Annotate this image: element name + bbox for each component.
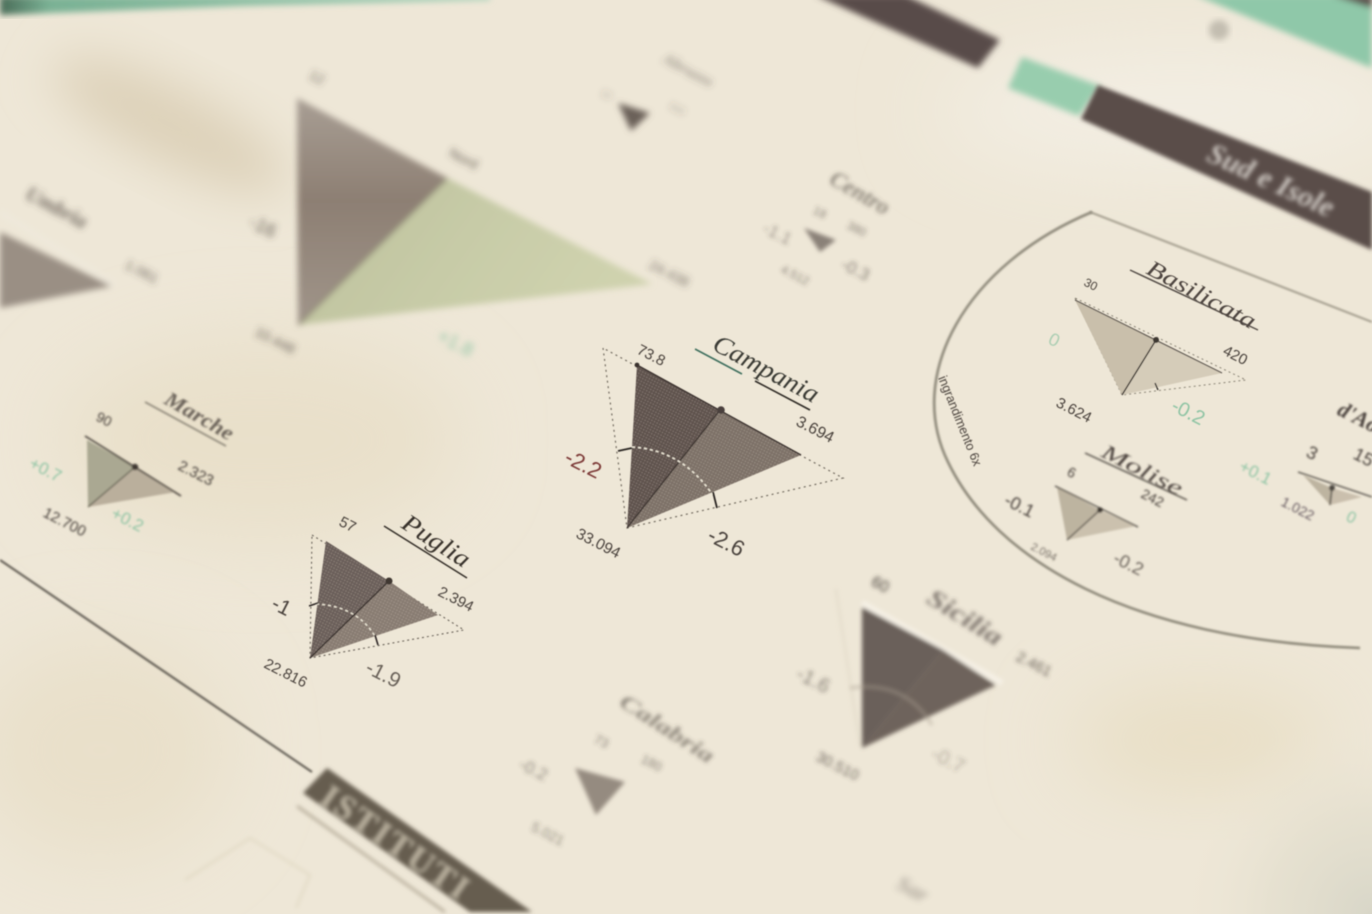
region: big Nord triangle: 10.448	[253, 323, 298, 357]
region: Campania: 73.8	[634, 341, 668, 370]
region: d'Aosta: +0.1	[1236, 457, 1275, 489]
region: Molise: 242	[1139, 485, 1167, 510]
region: Calabria: 180	[639, 751, 665, 775]
region: Calabria: -0.2	[516, 755, 551, 785]
region: big Nord triangle: +1.8	[434, 326, 477, 361]
region: Puglia: 57	[336, 513, 359, 536]
region: d'Aosta: 0	[1343, 508, 1359, 528]
region: big Nord triangle: 12	[307, 66, 328, 88]
region: Centro small	[760, 166, 894, 288]
region: Puglia: 2.394	[435, 583, 476, 616]
region: Campania: Campania	[708, 329, 824, 409]
region: Campania: -2.2	[561, 444, 606, 484]
region: big Nord triangle: Nord	[447, 144, 481, 172]
region: Molise: Molise	[1096, 438, 1187, 500]
region: d'Aosta: 3	[1303, 442, 1321, 464]
green tab	[1008, 57, 1100, 116]
region: Centro small: 4.512	[779, 262, 812, 288]
top green band	[0, 0, 490, 15]
region: Sicilia: -0.7	[928, 743, 968, 778]
region: Marche: 2.323	[175, 457, 216, 490]
region: Basilicata: 0	[1045, 329, 1063, 351]
heading bar: Sud e Isole	[1081, 85, 1372, 250]
region: Centro small: Centro	[826, 166, 894, 220]
region: Sicilia: 30.510	[813, 748, 862, 784]
region: top small triangle: Abruzzo	[659, 50, 716, 91]
region: Centro small: -0.3	[838, 255, 873, 285]
region: Sicilia	[793, 573, 1054, 784]
region: Puglia: -1	[268, 592, 295, 621]
region: Molise	[1001, 438, 1187, 580]
region: Sicilia: 60	[868, 573, 892, 597]
region: Sicilia: -1.6	[793, 663, 833, 698]
region: big Nord triangle: -16	[246, 212, 280, 243]
region: Molise: 2.094	[1029, 541, 1059, 564]
caption: ingrandimento 6x: ingrandimento 6x	[935, 374, 984, 469]
region: d'Aosta: 1.022	[1279, 493, 1317, 524]
region: Marche: 12.700	[40, 504, 89, 540]
region: left cut triangle: Umbria	[22, 181, 92, 234]
region: Puglia: 22.816	[261, 655, 310, 691]
region: Centro small: -1.1	[760, 219, 795, 249]
top right green band	[1195, 0, 1372, 68]
lower left box outline	[185, 838, 310, 908]
region: Campania: 33.094	[573, 525, 623, 562]
region: Puglia	[261, 509, 476, 693]
heading bar: Sud e Isole: Sud e Isole	[1202, 136, 1340, 224]
region: big Nord triangle	[246, 66, 692, 361]
region: Marche	[26, 386, 238, 540]
region: Basilicata: 3.624	[1053, 394, 1094, 427]
region: top small triangle: 310	[667, 101, 687, 118]
region: Puglia: -1.9	[362, 656, 404, 693]
region: Sicilia: 2.461	[1013, 648, 1054, 681]
heading bar: Istituti: ISTITUTI	[313, 778, 478, 909]
region: Calabria	[516, 689, 719, 849]
region: Sicilia: Sicilia	[922, 584, 1007, 652]
region: Centro small: 380	[845, 218, 869, 240]
panel divider lines	[0, 212, 1372, 772]
region: Calabria: 73	[592, 731, 611, 751]
magnifier circle outline	[934, 212, 1360, 648]
region: Basilicata: 420	[1220, 342, 1250, 369]
region: Marche: +0.7	[26, 454, 65, 486]
region: Centro small: 18	[811, 203, 829, 222]
region: Calabria: Calabria	[615, 689, 719, 768]
region: Basilicata: Basilicata	[1143, 255, 1260, 334]
region: d'Aosta	[1236, 396, 1372, 528]
blurred bottom label: Sar	[893, 870, 933, 908]
region: left cut triangle	[0, 181, 161, 308]
region: Molise: 6	[1065, 463, 1079, 481]
top dark header bar	[815, 0, 1000, 68]
region: Puglia: Puglia	[396, 509, 475, 573]
region: Campania: 3.694	[793, 413, 837, 447]
region: Molise: -0.1	[1001, 490, 1038, 522]
region: Molise: -0.2	[1110, 548, 1147, 580]
region: Marche: Marche	[160, 386, 238, 445]
region: Marche: 90	[94, 408, 115, 430]
region: Campania	[561, 329, 843, 562]
region: Campania: -2.6	[704, 522, 749, 562]
region: Basilicata: -0.2	[1168, 395, 1208, 430]
region: Basilicata: 30	[1082, 275, 1100, 294]
region: Basilicata	[1045, 255, 1260, 430]
region: top small triangle	[599, 50, 716, 131]
region: top small triangle: 12	[599, 88, 614, 103]
region: Calabria: 5.021	[529, 818, 567, 849]
heading bar: Istituti	[297, 768, 532, 912]
icon: top symbol	[1209, 20, 1229, 40]
region: Marche: +0.2	[108, 504, 147, 536]
region: left cut triangle: 1.061	[123, 256, 161, 287]
region: big Nord triangle: 24.438	[647, 256, 692, 290]
